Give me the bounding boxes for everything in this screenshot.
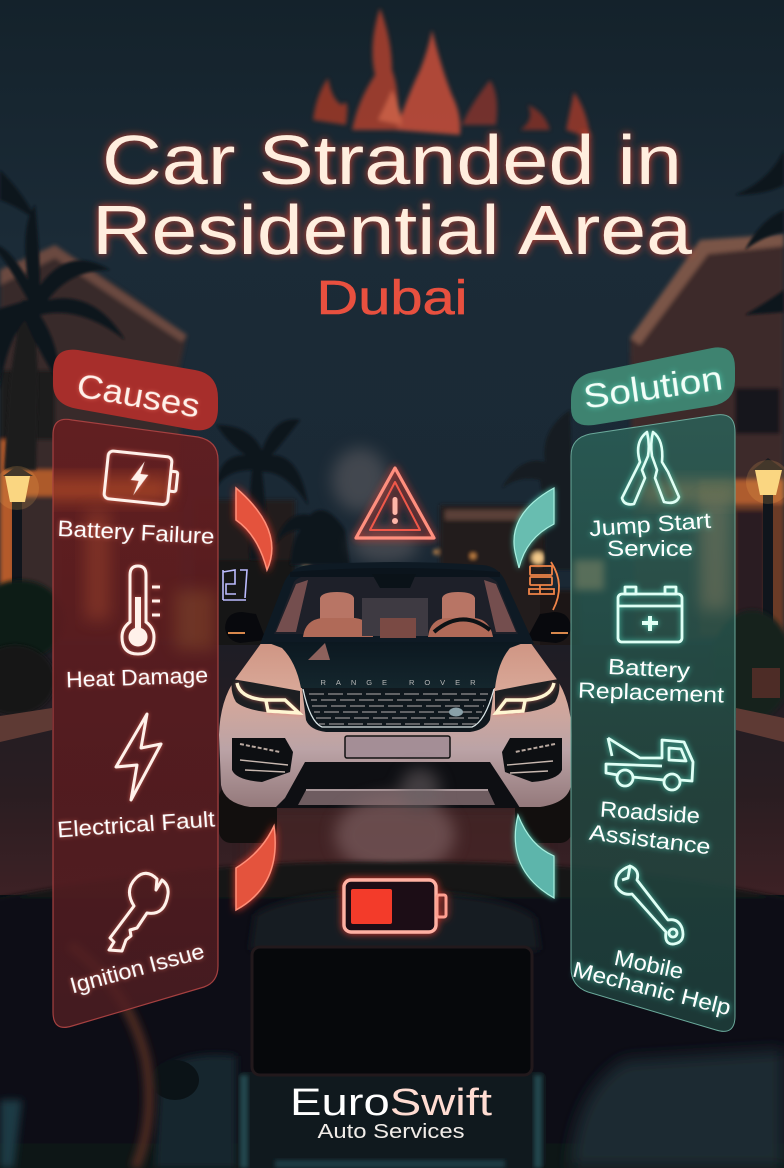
red arc lower left [236,826,275,910]
label: roadside assistance: Roadside [599,797,701,828]
brand logo [290,1082,493,1143]
dashboard [0,862,784,1168]
label: jump start service: Service [607,536,693,561]
brand tagline: Auto Services [318,1121,464,1143]
car mirrors [225,612,571,643]
teal arc lower right [515,815,554,898]
label: roadside assistance: Assistance [588,820,712,859]
label: roadside assistance [588,797,712,859]
icon: tow truck [606,738,693,790]
lower intake [275,762,520,808]
icon: thermometer [122,566,160,654]
neon warning triangle [356,468,434,538]
panel: causes [40,350,218,1027]
background: left villa [0,245,187,640]
label: battery replacement [578,654,724,708]
background: left street lamp [0,466,39,650]
badge text: RANGE ROVER [320,678,476,687]
title [92,121,692,269]
icon: car battery [618,587,682,642]
label: jump start service: Jump Start [588,508,712,541]
background: night sky [0,0,784,700]
label: mobile mechanic help: Mechanic Help [570,957,733,1020]
icon: lightning bolt [116,714,161,800]
red arc upper left [236,488,272,570]
background: palm trees [0,150,784,570]
left fog vent [232,738,293,782]
label: battery failure: Battery Failure [57,516,215,549]
background: right villa [630,234,784,640]
car roof and windshield [260,562,534,644]
icon: low battery on dashboard [344,880,446,932]
left headlight [232,679,300,714]
icon: battery failure [104,451,179,506]
car body [219,642,572,807]
right headlight [495,679,560,714]
background: right street lamp [746,458,784,645]
smoke below the car [335,768,455,875]
icon: ignition key [109,873,168,951]
smoke above the car [332,448,419,563]
brand name: Euro Swift [290,1082,493,1124]
label: mobile mechanic help: Mobile [612,945,686,984]
subtitle: Dubai: Dubai [316,272,468,325]
icon: small blue neon symbol [223,570,247,600]
right fog vent [502,738,562,782]
label: electrical fault: Electrical Fault [56,807,216,842]
background: road and shrubs [0,580,784,895]
solution panel background [571,415,735,1031]
causes panel reflections [40,478,215,650]
label: battery replacement: Replacement [578,677,724,708]
label: battery replacement: Battery [607,654,691,683]
teal arc upper right [514,488,554,568]
hero car [219,562,572,843]
causes panel background [53,419,218,1027]
label: ignition issue: Ignition Issue [67,939,207,998]
solution panel reflections [574,480,740,610]
car tires [219,785,572,843]
label: jump start service [588,508,712,561]
icon: small orange neon symbol [529,562,559,610]
hood reflection [308,643,330,660]
panel: solution [570,347,740,1031]
causes heading: Causes [74,367,203,425]
title: Residential Area [92,191,692,269]
background: flames above the title [313,8,590,138]
icon: wrench [616,866,683,944]
icon: jumper clamps [622,432,679,504]
solution heading pill [571,347,735,425]
number plate [345,736,450,758]
background: distant street and buildings [195,500,580,655]
car hood [266,642,526,688]
label: heat damage: Heat Damage [66,663,208,692]
causes heading pill [53,350,218,430]
solution heading: Solution [581,359,725,417]
car grille [302,688,494,732]
title: Car Stranded in [102,121,682,199]
center console with screen [238,947,546,1168]
